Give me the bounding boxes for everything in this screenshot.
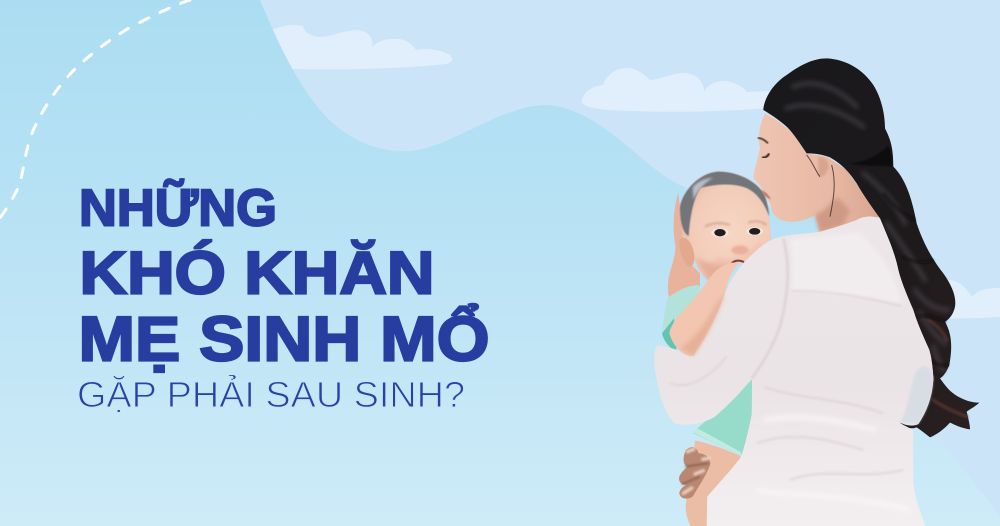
baby ear [679,238,694,267]
braid creases [883,193,948,366]
shirt folds [670,357,903,480]
cloud: centre right [582,68,770,112]
brow [758,138,768,143]
mother's hand behind baby's head [668,193,700,298]
title line: KHÓ KHĂN: KHÓ KHĂN [80,240,434,306]
back yoke seam [792,291,902,306]
mother's white shirt [654,217,933,526]
closed eye [762,153,769,158]
cloud: far right [940,280,1000,318]
mother's neck and face [753,113,880,233]
hair highlights [787,83,948,370]
title line: NHỮNG: NHỮNG [79,178,277,238]
shirt highlight panel [790,232,902,303]
clouds [270,25,452,69]
baby leg [686,441,741,526]
baby head [679,172,771,282]
baby arm over mother's shoulder [669,263,738,356]
title text block [77,178,490,415]
baby hair [680,172,769,236]
pale sky hill shape [260,0,1000,516]
face shadow on neck [815,197,850,233]
mother's hair and braid [763,58,979,437]
baby eyes [711,228,729,237]
subtitle line: GẶP PHẢI SAU SINH? [77,374,465,415]
lips [762,190,771,199]
sleeve seam [752,238,788,378]
baby brows and nose [705,221,767,227]
dashed flight path [0,0,190,218]
cloud: top left [270,25,452,69]
ear [818,157,829,177]
hair wisps by ear [807,155,834,217]
baby cheek shading [695,257,735,280]
mother's hand under baby [679,447,710,499]
title line: MẸ SINH MỔ: MẸ SINH MỔ [78,304,490,374]
baby onesie shoulder [662,285,700,352]
shirt side shadow [900,366,933,424]
baby onesie lower [693,378,753,456]
photo: mother holding baby [654,58,979,526]
hair tie fold [850,145,893,167]
baby mouth [732,261,744,263]
